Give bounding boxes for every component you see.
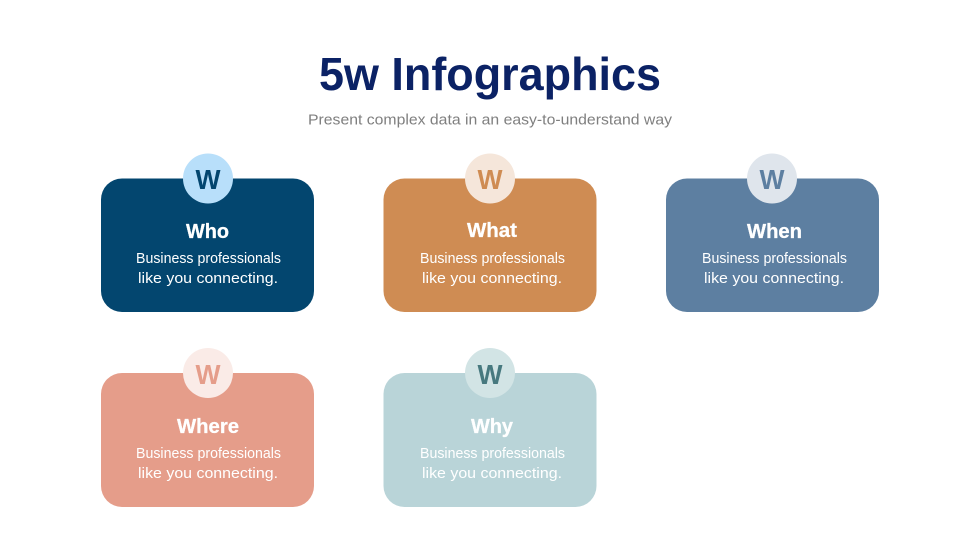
text: where description [136, 446, 281, 482]
subtitle: Present complex data in an easy-to-understand way [308, 112, 673, 128]
text: what description [420, 251, 565, 287]
heading: who: Who [186, 221, 229, 243]
icon: who badge [183, 154, 233, 204]
heading: where: Where [177, 416, 239, 438]
heading: what: What [467, 220, 517, 242]
text: why description: Business professionals [420, 446, 565, 462]
heading: why: Why [471, 416, 514, 438]
panel: why [384, 348, 596, 507]
text: where description: like you connecting. [138, 466, 278, 482]
heading: when: When [747, 221, 802, 243]
icon: why badge [465, 348, 515, 398]
panel: who [101, 154, 314, 312]
panel: what [384, 154, 596, 312]
icon: when badge [747, 154, 797, 204]
icon: where badge: W [196, 359, 221, 390]
icon: what badge: W [478, 164, 503, 195]
text: who description: Business professionals [136, 251, 281, 267]
text: when description: like you connecting. [704, 271, 844, 287]
icon: why badge: W [478, 359, 503, 390]
panel: when [666, 154, 879, 312]
icon: what badge [465, 154, 515, 204]
panel: where [101, 348, 314, 507]
text: who description [136, 251, 281, 287]
icon: who badge: W [196, 164, 221, 195]
icon: when badge: W [760, 164, 785, 195]
text: when description [702, 251, 847, 287]
text: who description: like you connecting. [138, 271, 278, 287]
text: what description: like you connecting. [422, 271, 562, 287]
icon: where badge [183, 348, 233, 398]
text: why description: like you connecting. [422, 466, 562, 482]
text: why description [420, 446, 565, 482]
text: what description: Business professionals [420, 251, 565, 267]
title: 5w Infographics [319, 48, 661, 100]
text: where description: Business professionals [136, 446, 281, 462]
text: when description: Business professionals [702, 251, 847, 267]
